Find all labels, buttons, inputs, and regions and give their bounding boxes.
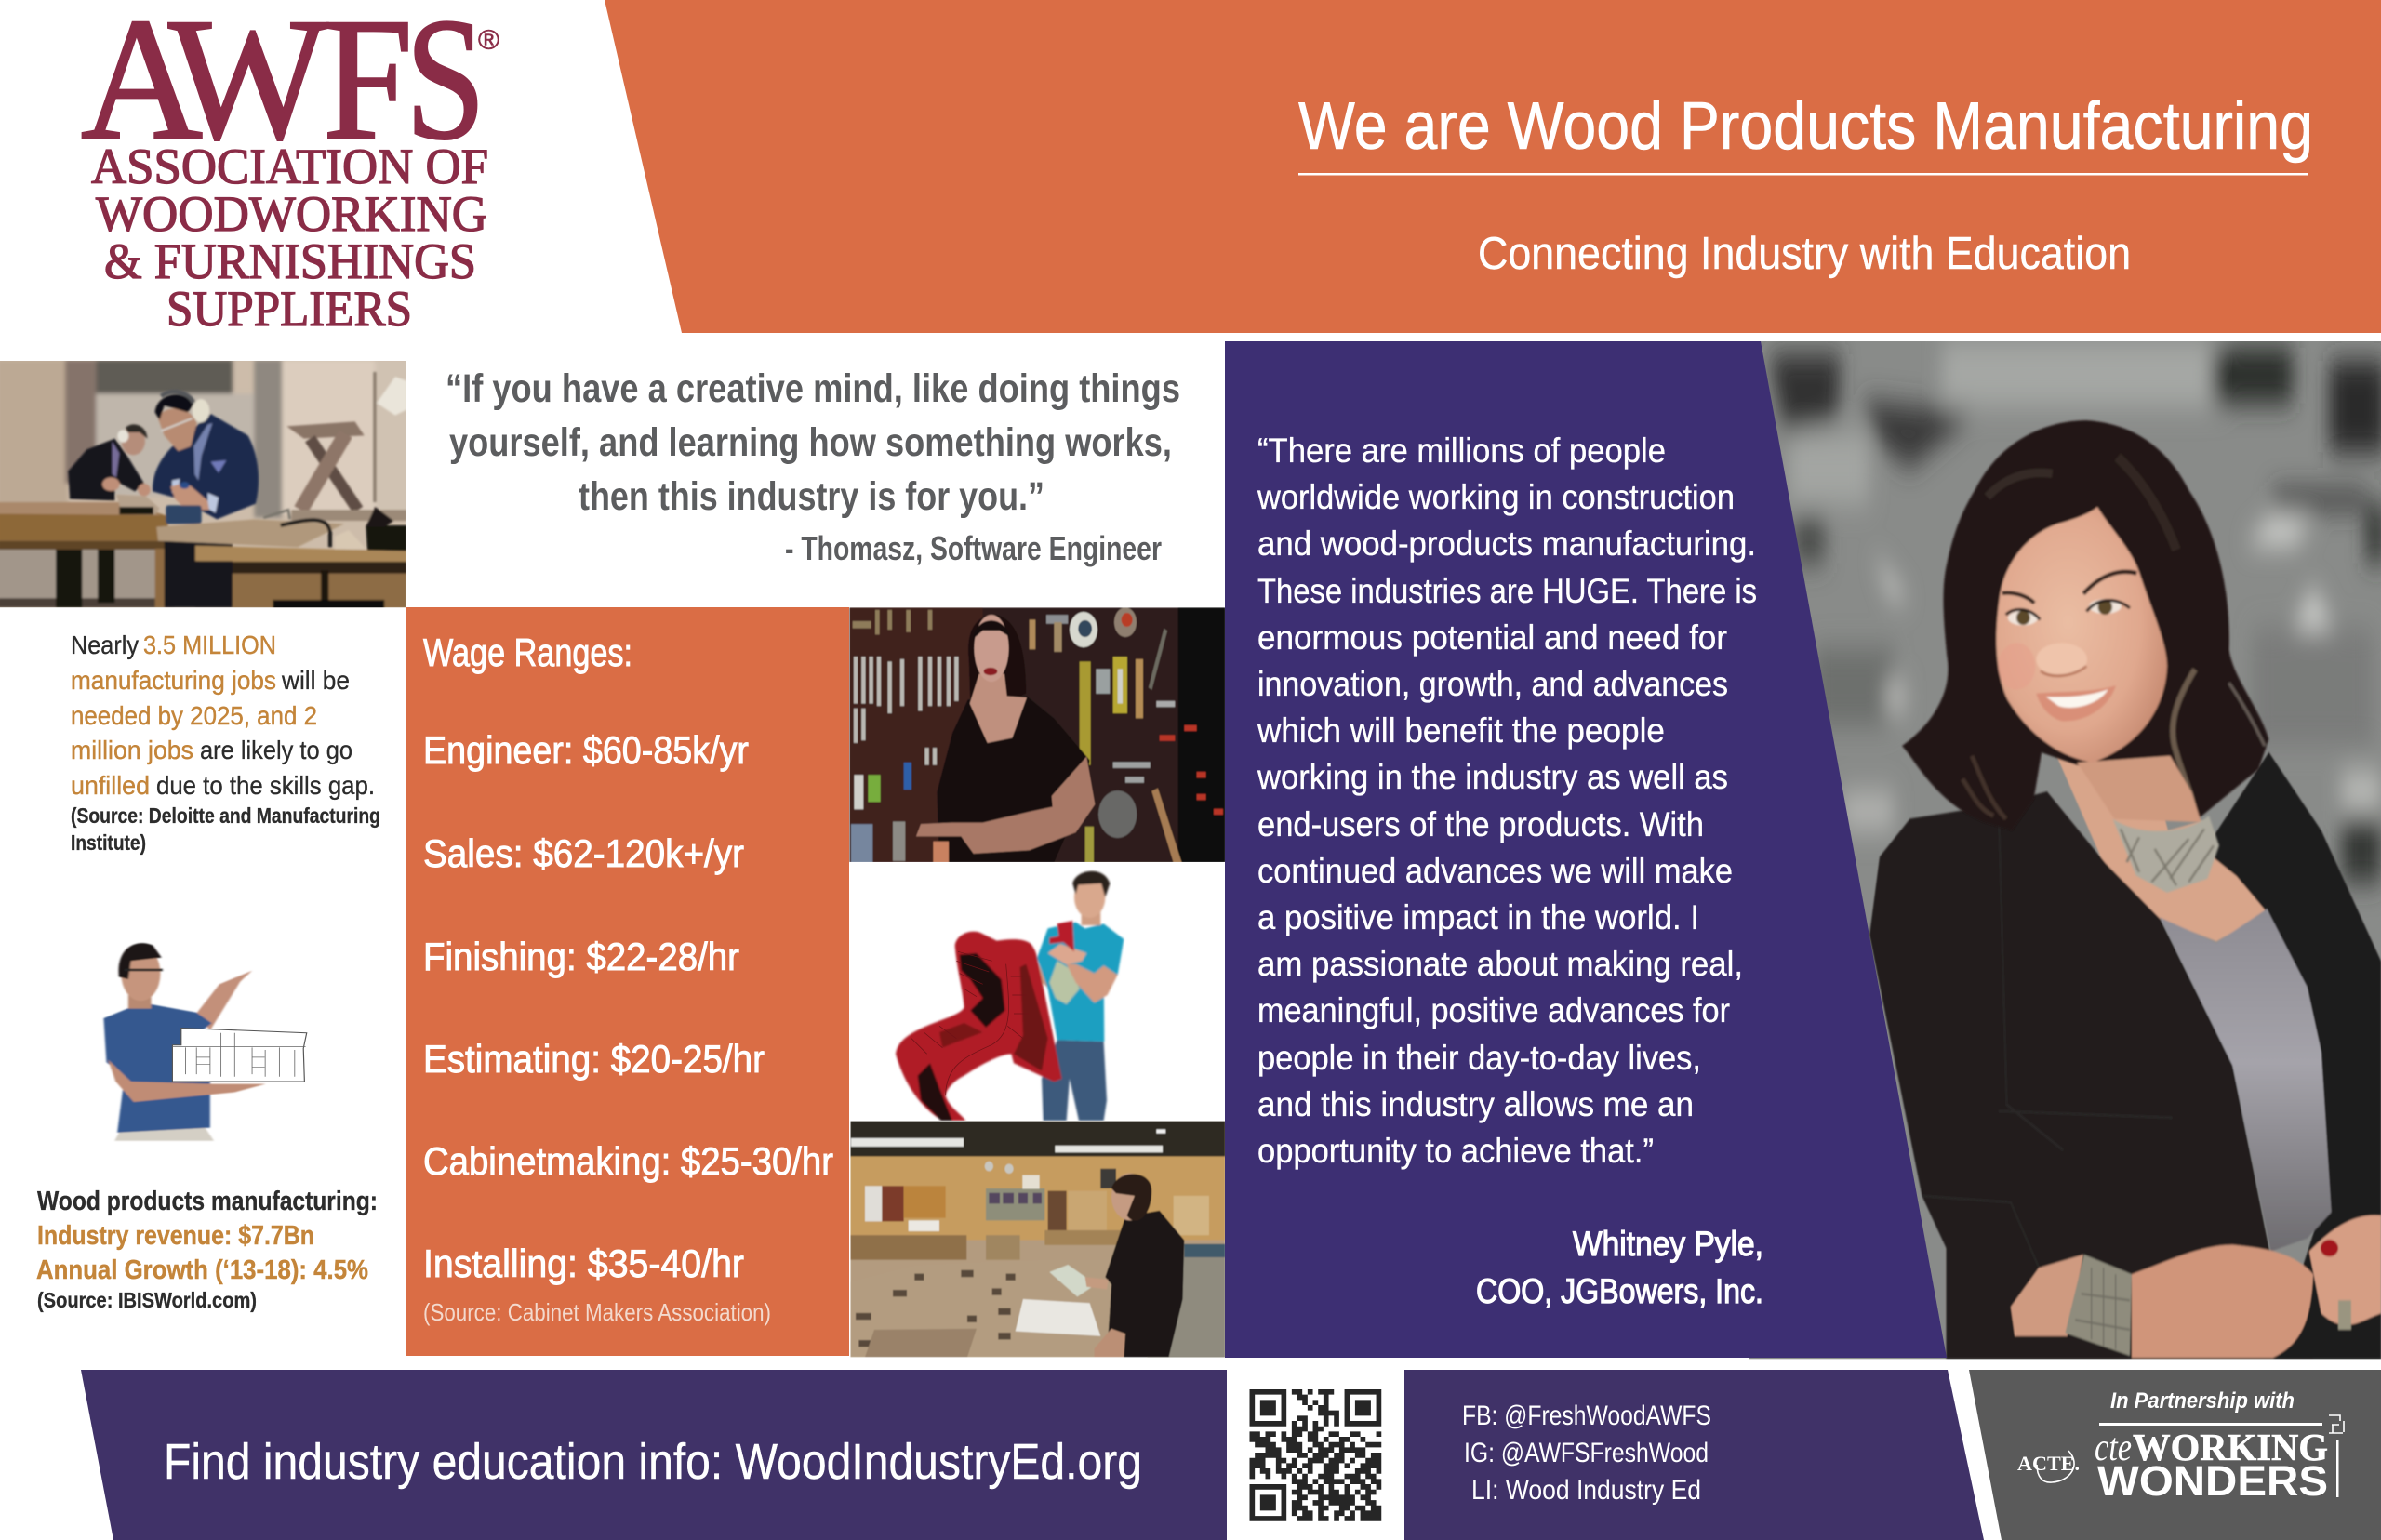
panel: Whitney Pyle quote: Whitney Pyle, (1573, 1225, 1763, 1263)
panel: Whitney Pyle quote: and this industry allows me an (1257, 1085, 1694, 1123)
AWFS logo: ASSOCIATION OF (91, 139, 488, 194)
footer: partner logos: In Partnership with (2110, 1388, 2295, 1414)
stat: industry revenue: Wood products manufacturing: (37, 1187, 378, 1216)
panel: wage ranges: Installing: $35-40/hr (423, 1241, 744, 1285)
logo: CTE Working Wonders: WONDERS (2097, 1457, 2328, 1505)
logo: ACTE: ACTE. (2017, 1452, 2080, 1475)
photo: workshop (850, 1121, 1225, 1361)
panel: Whitney Pyle quote: which will benefit the people (1257, 711, 1665, 750)
quote: Thomasz (446, 366, 1180, 567)
panel: Whitney Pyle quote: and wood-products manufacturing. (1257, 524, 1756, 563)
stat: manufacturing jobs: (Source: Deloitte and Manufacturing (71, 803, 380, 828)
quote: Thomasz: “If you have a creative mind, like doing things (446, 366, 1180, 411)
panel: wage ranges: Wage Ranges: (423, 631, 632, 674)
photo: man holding cabinet drawing (103, 943, 307, 1141)
AWFS logo: & FURNISHINGS (104, 233, 476, 289)
footer: education link (81, 1370, 1227, 1540)
footer: education link: Find industry education info: WoodIndustryEd.org (164, 1434, 1142, 1490)
stat: manufacturing jobs: Nearly (71, 631, 139, 659)
panel: Whitney Pyle quote: working in the industry as well as (1257, 758, 1728, 796)
panel: Whitney Pyle quote: continued advances we will make (1257, 852, 1733, 890)
stat: manufacturing jobs: are likely to go (200, 736, 352, 764)
stat: manufacturing jobs: manufacturing jobs (71, 666, 276, 695)
stat: manufacturing jobs (71, 631, 380, 855)
photo: woman at tool wall (849, 607, 1225, 862)
stat: industry revenue: Annual Growth (‘13-18): 4.5% (36, 1255, 368, 1285)
stat: industry revenue: (Source: IBISWorld.com) (37, 1288, 257, 1312)
panel: Whitney Pyle quote: worldwide working in construction (1257, 478, 1735, 516)
photo: two woodworkers at bench (0, 360, 409, 609)
QR code (1250, 1392, 1381, 1519)
panel: wage ranges: Finishing: $22-28/hr (423, 935, 739, 978)
logo: CTE Working Wonders (2095, 1426, 2338, 1505)
panel: Whitney Pyle quote: meaningful, positive advances for (1257, 991, 1730, 1029)
logo: CTE Working Wonders: cte (2095, 1427, 2132, 1469)
AWFS logo: ® (478, 25, 499, 56)
panel: Whitney Pyle quote: enormous potential and need for (1257, 618, 1727, 657)
icon: circuit (2329, 1415, 2344, 1433)
panel: Whitney Pyle quote: These industries are HUGE. There is (1257, 572, 1757, 610)
AWFS logo: WOODWORKING (96, 186, 487, 242)
photo: man with red chair (849, 862, 1225, 1121)
panel: Whitney Pyle quote: end-users of the products. With (1257, 805, 1704, 843)
footer: social handles: LI: Wood Industry Ed (1471, 1475, 1701, 1506)
logo: CTE Working Wonders: WORKING (2133, 1426, 2328, 1468)
panel: wage ranges: Cabinetmaking: $25-30/hr (423, 1139, 833, 1183)
panel: Whitney Pyle quote: a positive impact in the world. I (1257, 898, 1699, 936)
subtitle: Connecting Industry with Education (1478, 229, 2131, 279)
stat: manufacturing jobs: unfilled (71, 771, 150, 800)
footer: social handles: FB: @FreshWoodAWFS (1462, 1401, 1711, 1431)
quote: Thomasz: yourself, and learning how something works, (449, 420, 1172, 465)
stat: manufacturing jobs: million jobs (71, 736, 193, 764)
panel: Whitney Pyle quote: COO, JGBowers, Inc. (1476, 1272, 1763, 1310)
panel: Whitney Pyle quote: opportunity to achieve that.” (1257, 1132, 1654, 1170)
footer: social handles (1404, 1370, 1984, 1540)
panel: Whitney Pyle quote (1225, 341, 1947, 1358)
stat: manufacturing jobs: due to the skills gap. (156, 771, 375, 800)
quote: Thomasz: then this industry is for you.” (579, 474, 1044, 519)
panel: wage ranges (406, 607, 849, 1356)
quote: Thomasz: - Thomasz, Software Engineer (785, 529, 1162, 567)
panel: Whitney Pyle quote: people in their day-to-day lives, (1257, 1039, 1701, 1077)
header banner (605, 0, 2381, 333)
stat: manufacturing jobs: 3.5 MILLION (143, 631, 276, 659)
panel: wage ranges: Sales: $62-120k+/yr (423, 831, 744, 875)
AWFS logo: SUPPLIERS (166, 281, 412, 337)
stat: manufacturing jobs: will be (281, 666, 350, 695)
AWFS logo (81, 0, 499, 337)
panel: Whitney Pyle quote: am passionate about making real, (1257, 945, 1743, 983)
portrait head and hair (1902, 420, 2268, 893)
footer: partner logos (1969, 1370, 2381, 1540)
panel: wage ranges: (Source: Cabinet Makers Association) (423, 1298, 771, 1326)
panel: Whitney Pyle quote: innovation, growth, and advances (1257, 665, 1728, 703)
stat: industry revenue: Industry revenue: $7.7Bn (37, 1221, 314, 1251)
panel: Whitney Pyle quote: “There are millions of people (1257, 431, 1666, 470)
stat: industry revenue (36, 1187, 378, 1312)
photo: Whitney Pyle portrait (1749, 341, 2381, 1359)
panel: wage ranges: Engineer: $60-85k/yr (423, 728, 749, 772)
stat: manufacturing jobs: needed by 2025, and 2 (71, 701, 317, 730)
footer: social handles: IG: @AWFSFreshWood (1464, 1438, 1709, 1468)
stat: manufacturing jobs: Institute) (71, 830, 146, 855)
panel: wage ranges: Estimating: $20-25/hr (423, 1037, 765, 1081)
